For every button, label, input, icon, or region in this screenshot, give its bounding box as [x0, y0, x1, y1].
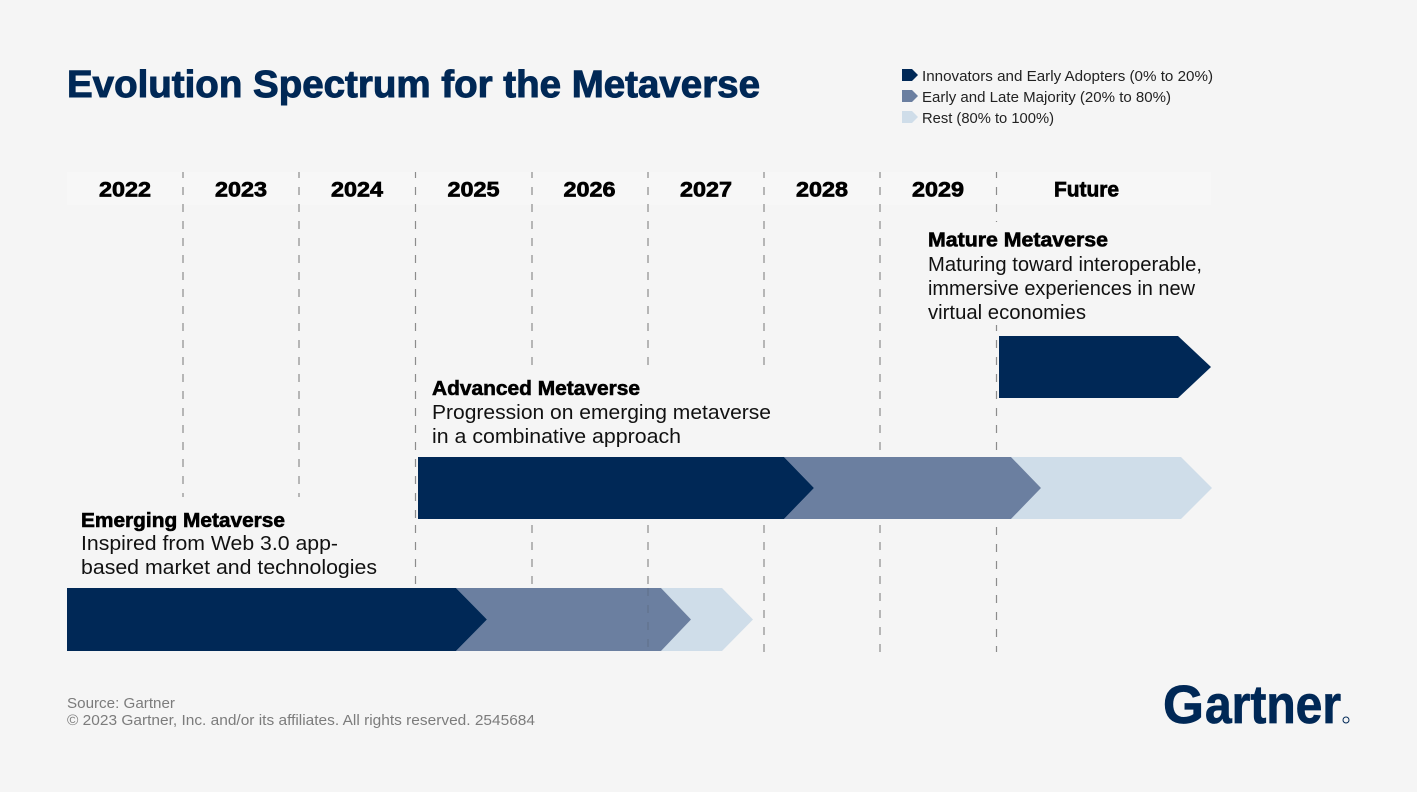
description: mature metaverse: immersive experiences in new — [928, 278, 1196, 300]
arrow: mature metaverse — [999, 336, 1211, 398]
description: mature metaverse: Maturing toward interoperable, — [928, 254, 1202, 276]
panel: mature metaverse — [920, 222, 1211, 398]
source note: Source: Gartner — [67, 696, 175, 712]
description: emerging metaverse: based market and technologies — [81, 557, 377, 579]
description: emerging metaverse: Inspired from Web 3.0 app- — [81, 533, 338, 555]
year header band: 2023 — [215, 178, 267, 202]
year header band: 2028 — [796, 178, 848, 202]
description: mature metaverse — [928, 254, 1202, 324]
description: mature metaverse: virtual economies — [928, 302, 1086, 324]
logo: Gartner: G — [1163, 675, 1204, 735]
description: advanced metaverse — [432, 402, 771, 448]
description: advanced metaverse: Progression on emerging metaverse — [432, 402, 771, 424]
year header band: 2025 — [448, 178, 500, 202]
year header band: 2024 — [331, 178, 383, 202]
panel: advanced metaverse — [418, 378, 1212, 519]
source note — [67, 696, 535, 729]
logo: Gartner: artner — [1205, 675, 1341, 735]
arrows: advanced metaverse — [418, 457, 1212, 519]
description: emerging metaverse — [81, 533, 377, 579]
source note: © 2023 Gartner, Inc. and/or its affiliates. All rights reserved. 2545684 — [67, 713, 535, 729]
arrows: emerging metaverse — [67, 588, 753, 651]
heading: advanced metaverse: Advanced Metaverse — [432, 378, 640, 400]
legend item: early and late majority: Early and Late Majority (20% to 80%) — [922, 90, 1171, 106]
year header band — [67, 172, 1211, 205]
year header band: Future — [1054, 178, 1119, 202]
year header band: 2029 — [912, 178, 964, 202]
year header band: 2027 — [680, 178, 732, 202]
legend item: rest: Rest (80% to 100%) — [922, 111, 1054, 127]
panel: emerging metaverse — [67, 510, 753, 651]
year header band: 2026 — [564, 178, 616, 202]
legend — [902, 69, 1213, 127]
description: advanced metaverse: in a combinative approach — [432, 426, 681, 448]
heading: emerging metaverse: Emerging Metaverse — [81, 510, 285, 532]
title: Evolution Spectrum for the Metaverse — [67, 64, 760, 106]
year header band: 2022 — [99, 178, 151, 202]
heading: mature metaverse: Mature Metaverse — [928, 230, 1108, 252]
legend item: innovators and early adopters: Innovators and Early Adopters (0% to 20%) — [922, 69, 1213, 85]
